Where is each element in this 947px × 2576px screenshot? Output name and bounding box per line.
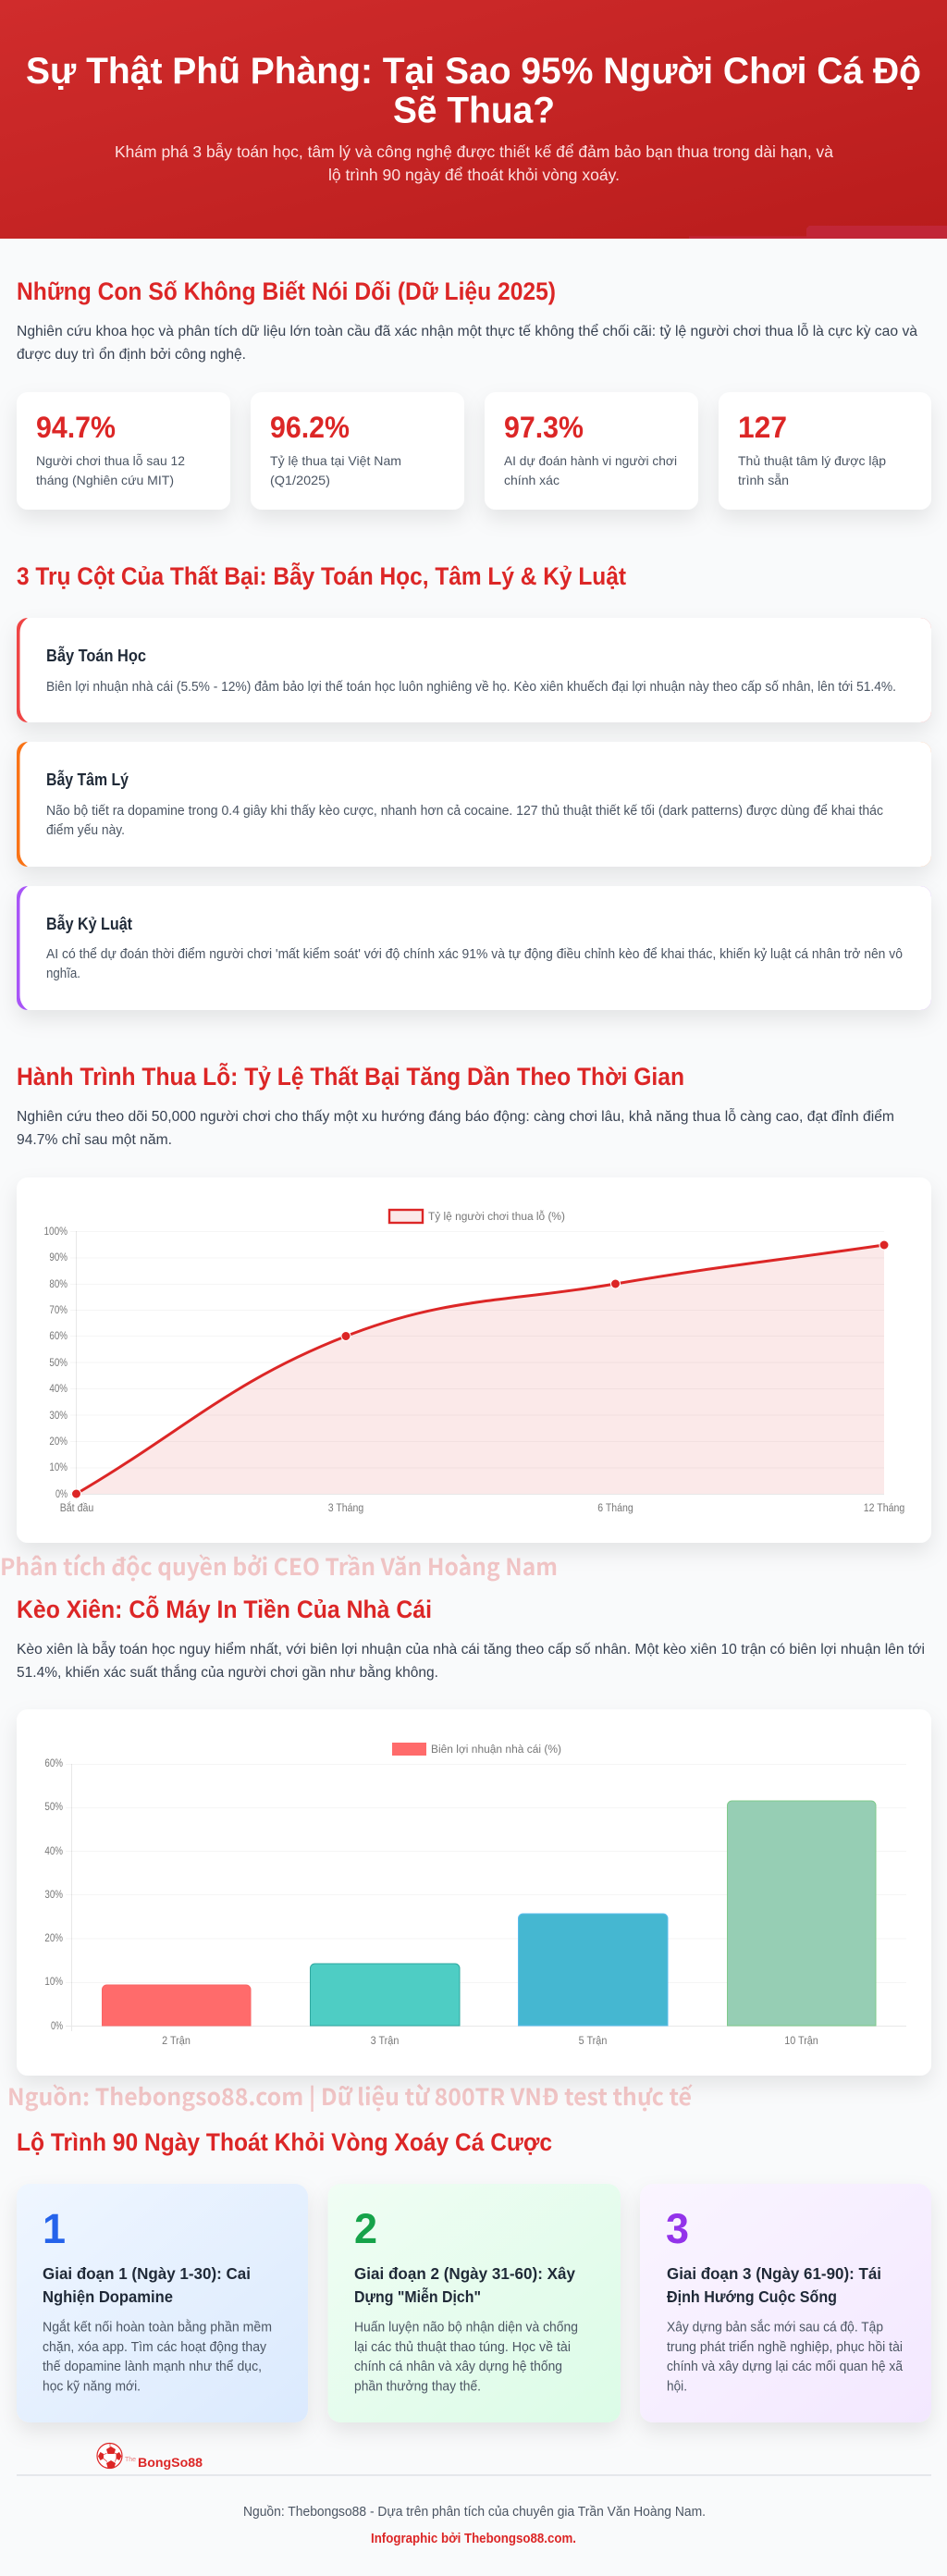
line chart y axis labels: [44, 1226, 68, 1500]
roadmap card: phase 2: [327, 2184, 621, 2422]
stat card: 96.2%: 96.2%: [270, 411, 350, 444]
stat card: 94.7%: 94.7%: [36, 411, 116, 444]
roadmap card: phase 1: thế dopamine lành mạnh như thể dục,: [43, 2360, 262, 2374]
pillar card: math trap: [17, 618, 931, 722]
roadmap card: phase 3: [640, 2184, 931, 2422]
stat card: 96.2%: (Q1/2025): [270, 473, 330, 487]
subtitle: Khám phá 3 bẫy toán học, tâm lý và công nghệ được thiết kế để đảm bảo bạn thua trong dài hạn, và: [115, 142, 833, 161]
roadmap card: phase 3: Giai đoạn 3 (Ngày 61-90): Tái: [667, 2264, 881, 2283]
roadmap card: phase 3: trung phát triển nghề nghiệp, phục hồi tài: [667, 2340, 903, 2355]
stat card: 97.3%: 97.3%: [504, 411, 584, 444]
line chart legend: [389, 1210, 565, 1223]
title: Sẽ Thua?: [393, 91, 555, 131]
watermark: CEO analysis: Phân tích độc quyền bởi CEO Trần Văn Hoàng Nam: [0, 1549, 558, 1583]
section heading: roadmap: Lộ Trình 90 Ngày Thoát Khỏi Vòng Xoáy Cá Cược: [17, 2128, 552, 2156]
footer source line: Nguồn: Thebongso88 - Dựa trên phân tích của chuyên gia Trần Văn Hoàng Nam.: [243, 2505, 706, 2520]
line chart y axis labels: 100%: [44, 1226, 68, 1238]
intro paragraph: parlay: Kèo xiên là bẫy toán học nguy hiểm nhất, với biên lợi nhuận của nhà cái tăng theo cấp số nhân. Một kèo xiên 10 trận có biên lợi nhuận lên tới: [17, 1640, 925, 1658]
bar chart x axis labels: 3 Trận: [371, 2036, 399, 2047]
bar chart x axis labels: 5 Trận: [579, 2036, 607, 2047]
stat card: 97.3%: [485, 392, 698, 510]
line chart x axis labels: 3 Tháng: [328, 1503, 363, 1514]
roadmap card: phase 2: Giai đoạn 2 (Ngày 31-60): Xây: [354, 2264, 575, 2283]
roadmap card: phase 2: Huấn luyện não bộ nhận diện và chống: [354, 2320, 578, 2335]
stat card: 96.2%: Tỷ lệ thua tại Việt Nam: [270, 453, 401, 468]
watermark: source: Nguồn: Thebongso88.com | Dữ liệu từ 800TR VNĐ test thực tế: [7, 2079, 693, 2113]
line chart panel: [17, 1177, 931, 1543]
line chart y axis labels: 60%: [49, 1331, 68, 1342]
bar chart y axis labels: 50%: [44, 1802, 63, 1813]
roadmap card: phase 2: chính cá nhân và xây dựng hệ thống: [354, 2360, 562, 2374]
footer credit line: Infographic bởi Thebongso88.com.: [371, 2532, 576, 2546]
roadmap card: phase 2: Dựng "Miễn Dịch": [354, 2286, 481, 2306]
pillar card: math trap: Bẫy Toán Học: [46, 646, 146, 665]
bar: 2 matches: [102, 1985, 251, 2026]
bar: 3 matches: [311, 1964, 460, 2026]
line chart y axis labels: 40%: [49, 1384, 68, 1395]
bar chart x axis labels: [162, 2036, 818, 2047]
stat card: 127: [719, 392, 931, 510]
line chart x axis labels: Bắt đầu: [60, 1502, 93, 1514]
stat card: 94.7%: [17, 392, 230, 510]
pillar card: discipline trap: nghĩa.: [46, 967, 80, 981]
subtitle: lộ trình 90 ngày để thoát khỏi vòng xoáy.: [328, 166, 620, 184]
roadmap card: phase 1: Giai đoạn 1 (Ngày 1-30): Cai: [43, 2264, 251, 2283]
bar chart y axis labels: 30%: [44, 1890, 63, 1901]
intro paragraph: numbers: [17, 322, 917, 363]
pillar card: discipline trap: Bẫy Kỷ Luật: [46, 914, 132, 933]
pillar card: psychology trap: Bẫy Tâm Lý: [46, 770, 129, 789]
subtitle: [115, 142, 833, 184]
intro paragraph: numbers: Nghiên cứu khoa học và phân tích dữ liệu lớn toàn cầu đã xác nhận một thực tế không thể chối cãi: tỷ lệ người chơi thua lỗ là cực kỳ cao và: [17, 322, 917, 339]
icon: football: [97, 2444, 122, 2468]
pillar card: psychology trap: Não bộ tiết ra dopamine trong 0.4 giây khi thấy kèo cược, nhanh hơn cả cocaine. 127 thủ thuật thiết kế tối (dark patterns) được dùng để khai thác: [46, 804, 883, 819]
logo: TheBongSo88: [97, 2444, 203, 2470]
stat card: 94.7%: Người chơi thua lỗ sau 12: [36, 453, 185, 468]
line chart y axis labels: 30%: [49, 1411, 68, 1422]
line chart y axis labels: 80%: [49, 1279, 68, 1290]
bar: 10 matches: [727, 1801, 876, 2026]
loss curve: [76, 1245, 884, 1494]
stat card: 97.3%: chính xác: [504, 473, 560, 487]
stat card: 127: 127: [738, 411, 787, 444]
intro paragraph: loss journey: 94.7% chỉ sau một năm.: [17, 1132, 172, 1148]
header banner: [0, 0, 947, 239]
stat card: 127: Thủ thuật tâm lý được lập: [738, 453, 886, 468]
bar chart panel: [17, 1709, 931, 2076]
bar chart y axis labels: 40%: [44, 1846, 63, 1857]
pillar card: math trap: Biên lợi nhuận nhà cái (5.5% - 12%) đảm bảo lợi thế toán học luôn nghiêng về họ. Kèo xiên khuếch đại lợi nhuận này theo cấp số nhân, lên tới 51.4%.: [46, 680, 896, 695]
logo: TheBongSo88: BongSo88: [138, 2455, 203, 2470]
bar chart x axis labels: 2 Trận: [162, 2036, 191, 2047]
stat card: 94.7%: tháng (Nghiên cứu MIT): [36, 473, 174, 487]
roadmap card: phase 2: phần thưởng thay thế.: [354, 2379, 481, 2394]
section heading: numbers: Những Con Số Không Biết Nói Dối (Dữ Liệu 2025): [17, 277, 556, 305]
intro paragraph: loss journey: Nghiên cứu theo dõi 50,000 người chơi cho thấy một xu hướng đáng báo động: càng chơi lâu, khả năng thua lỗ càng cao, đạt đỉnh điểm: [17, 1107, 894, 1125]
title: [26, 51, 921, 131]
logo: TheBongSo88: The: [125, 2457, 136, 2463]
line chart y axis labels: 70%: [49, 1305, 68, 1316]
roadmap card: phase 3: Xây dựng bản sắc mới sau cá độ. Tập: [667, 2320, 883, 2335]
stat card: 96.2%: [251, 392, 464, 510]
bar chart legend: [392, 1743, 561, 1756]
roadmap card: phase 2: lại các thủ thuật thao túng. Học về tài: [354, 2340, 571, 2355]
stat card: 97.3%: AI dự đoán hành vi người chơi: [504, 453, 677, 468]
intro paragraph: parlay: [17, 1640, 925, 1681]
line chart x axis labels: 6 Tháng: [597, 1503, 633, 1514]
bar chart legend: Biên lợi nhuận nhà cái (%): [431, 1744, 561, 1756]
roadmap card: phase 1: 1: [43, 2205, 66, 2252]
roadmap card: phase 1: học kỹ năng mới.: [43, 2379, 141, 2394]
title: Sự Thật Phũ Phàng: Tại Sao 95% Người Chơi Cá Độ: [26, 51, 921, 92]
data points: [72, 1240, 889, 1498]
roadmap card: phase 3: chính và xây dựng lại các mối quan hệ xã: [667, 2360, 903, 2374]
line chart x axis labels: [60, 1502, 904, 1514]
line chart y axis labels: 10%: [49, 1462, 68, 1473]
line chart y axis labels: 20%: [49, 1436, 68, 1448]
bar chart x axis labels: 10 Trận: [784, 2036, 818, 2047]
section heading: loss journey: Hành Trình Thua Lỗ: Tỷ Lệ Thất Bại Tăng Dần Theo Thời Gian: [17, 1062, 684, 1091]
roadmap card: phase 2: 2: [354, 2205, 377, 2252]
section heading: parlay: Kèo Xiên: Cỗ Máy In Tiền Của Nhà Cái: [17, 1595, 432, 1623]
line chart legend: Tỷ lệ người chơi thua lỗ (%): [428, 1211, 565, 1223]
bar chart y axis labels: 20%: [44, 1933, 63, 1944]
bar chart y axis labels: 60%: [44, 1758, 63, 1769]
roadmap card: phase 1: [17, 2184, 308, 2422]
roadmap card: phase 1: Ngắt kết nối hoàn toàn bằng phần mềm: [43, 2320, 272, 2335]
roadmap card: phase 3: 3: [666, 2205, 689, 2252]
line chart x axis labels: 12 Tháng: [864, 1503, 904, 1514]
area under the loss curve: [76, 1245, 884, 1494]
bar chart y axis labels: [44, 1758, 63, 2032]
intro paragraph: parlay: 51.4%, khiến xác suất thắng của người chơi gần như bằng không.: [17, 1663, 438, 1681]
pillar card: psychology trap: [17, 742, 931, 867]
pillar card: discipline trap: [17, 886, 931, 1010]
bar chart y axis labels: 10%: [44, 1977, 63, 1988]
section heading: pillars: 3 Trụ Cột Của Thất Bại: Bẫy Toán Học, Tâm Lý & Kỷ Luật: [17, 561, 626, 590]
line chart y axis labels: 90%: [49, 1252, 68, 1263]
roadmap card: phase 1: Nghiện Dopamine: [43, 2287, 173, 2306]
intro paragraph: numbers: được duy trì ổn định bởi công nghệ.: [17, 346, 246, 363]
roadmap card: phase 1: chặn, xóa app. Tìm các hoạt động thay: [43, 2340, 267, 2355]
roadmap card: phase 3: hội.: [667, 2379, 687, 2394]
bar: 5 matches: [518, 1914, 668, 2026]
line chart y axis labels: 0%: [55, 1489, 68, 1500]
pillar card: psychology trap: điểm yếu này.: [46, 823, 125, 838]
line chart y axis labels: 50%: [49, 1358, 68, 1369]
roadmap card: phase 3: Định Hướng Cuộc Sống: [667, 2287, 837, 2306]
stat card: 127: trình sẵn: [738, 473, 789, 487]
pillar card: discipline trap: AI có thể dự đoán thời điểm người chơi 'mất kiểm soát' với độ chính xác 91% và tự động điều chỉnh kèo để khai thác, khiến kỷ luật cá nhân trở nên vô: [46, 947, 903, 962]
bar chart y axis labels: 0%: [51, 2021, 63, 2032]
intro paragraph: loss journey: [17, 1107, 894, 1148]
